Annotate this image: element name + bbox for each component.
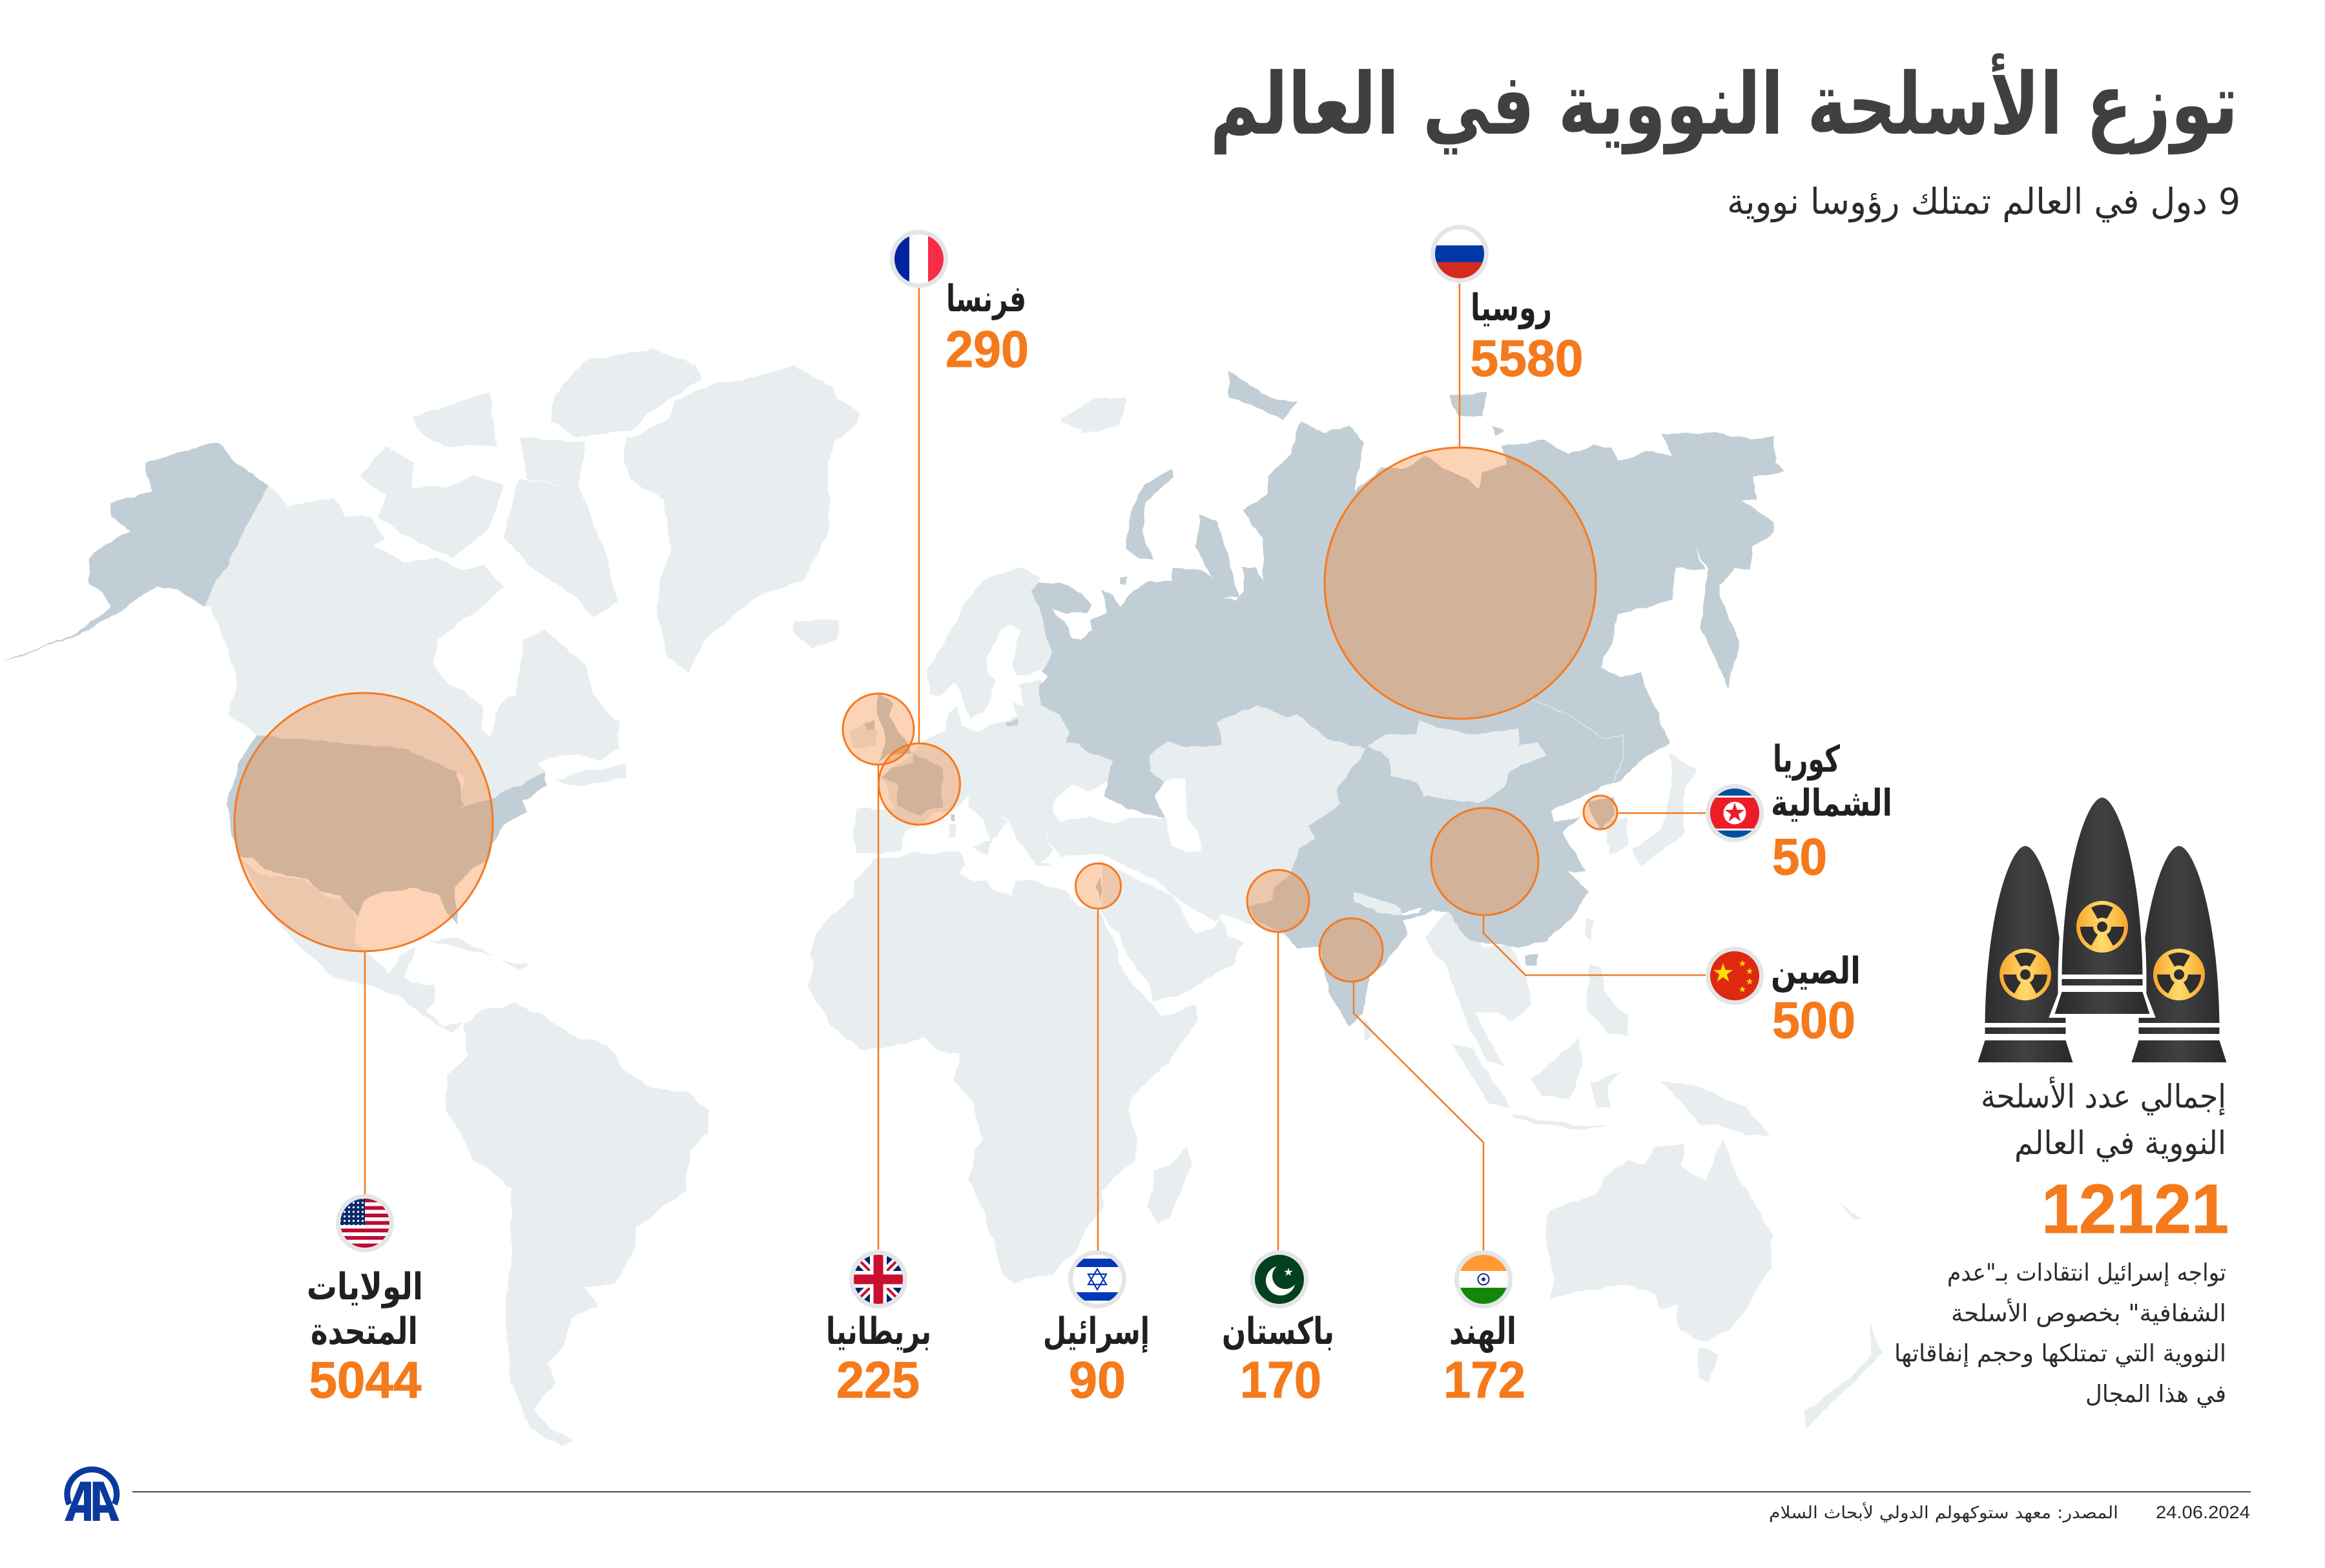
bubble: China 500 bbox=[1431, 808, 1538, 915]
label: Israel bbox=[1043, 1310, 1150, 1408]
icon: three nuclear warheads bbox=[1978, 798, 2227, 1062]
label: China bbox=[1771, 950, 1861, 1049]
flag: Israel bbox=[1068, 1250, 1126, 1308]
label: France bbox=[946, 278, 1029, 378]
bubble: Pakistan 170 bbox=[1247, 870, 1309, 932]
flag: North Korea bbox=[1706, 784, 1764, 842]
icon: radiation centre bbox=[2076, 901, 2128, 953]
flag: China bbox=[1706, 947, 1764, 1005]
label: Israel: إسرائيل bbox=[1043, 1310, 1150, 1354]
map: India and Pakistan (highlighted) bbox=[1248, 840, 1537, 1027]
footer rule bbox=[132, 1491, 2251, 1492]
map: China–Russia border line bbox=[1531, 700, 1623, 780]
label: Russia: روسيا bbox=[1471, 287, 1552, 329]
total heading: النووية في العالم bbox=[2014, 1124, 2226, 1162]
flag: Pakistan bbox=[1250, 1250, 1308, 1308]
icon: radiation left bbox=[2000, 949, 2051, 1000]
map: United States (highlighted) bbox=[4, 442, 547, 924]
label: India: 172 bbox=[1443, 1351, 1525, 1408]
label: France: 290 bbox=[946, 320, 1029, 378]
map: Europe and Middle East bbox=[850, 568, 1367, 940]
label: United Kingdom bbox=[826, 1310, 931, 1408]
note about Israel: النووية التي تمتلكها وحجم إنفاقاتها bbox=[1894, 1339, 2226, 1367]
label: China: الصين bbox=[1771, 950, 1861, 993]
label: France: فرنسا bbox=[946, 278, 1026, 320]
map: Mexico, Caribbean and South America bbox=[239, 856, 708, 1445]
label: India: الهند bbox=[1449, 1310, 1516, 1353]
warhead: centre bbox=[2054, 798, 2150, 1014]
label: North Korea: كوريا bbox=[1773, 738, 1841, 781]
map: North America, Greenland and Arctic islands bbox=[204, 349, 1127, 808]
label: Pakistan: باكستان bbox=[1222, 1310, 1334, 1353]
leader lines bbox=[365, 284, 1706, 1250]
label: Pakistan bbox=[1222, 1310, 1334, 1408]
total heading bbox=[1981, 1077, 2226, 1162]
label: North Korea: الشمالية bbox=[1771, 782, 1892, 825]
note about Israel: في هذا المجال bbox=[2085, 1380, 2226, 1408]
label: Israel: 90 bbox=[1069, 1351, 1126, 1408]
date: 24.06.2024 bbox=[2156, 1502, 2250, 1522]
flag: India bbox=[1454, 1250, 1513, 1308]
bubble: India 172 bbox=[1319, 918, 1383, 982]
map: Russia west and British Isles, France, Israel (highlighted) bbox=[864, 452, 1324, 901]
map: Africa and Arabia bbox=[808, 852, 1243, 1283]
world map bbox=[4, 349, 1883, 1445]
map: South-East Asia and Oceania bbox=[1363, 909, 1883, 1429]
bubble: United States 5044 bbox=[234, 693, 493, 951]
label: Pakistan: 170 bbox=[1240, 1351, 1321, 1408]
flag: United Kingdom bbox=[849, 1250, 907, 1308]
map: Japan, South Korea and Svalbard bbox=[1061, 397, 1699, 867]
total number: 12121 bbox=[2041, 1170, 2229, 1248]
bubble: France 290 bbox=[878, 743, 960, 825]
total heading: إجمالي عدد الأسلحة bbox=[1981, 1077, 2226, 1116]
flag: France bbox=[890, 230, 948, 288]
label: Russia bbox=[1470, 287, 1584, 387]
bubble: United Kingdom 225 bbox=[843, 694, 914, 765]
label: United Kingdom: 225 bbox=[836, 1351, 920, 1408]
map: Nepal bbox=[1352, 891, 1401, 914]
label: United States bbox=[307, 1266, 423, 1408]
label: India bbox=[1443, 1310, 1525, 1408]
warhead: left bbox=[1978, 846, 2073, 1062]
icon: AA logo bbox=[65, 1469, 119, 1521]
map: Russia east and China (highlighted) bbox=[1199, 370, 1784, 947]
source: المصدر: معهد ستوكهولم الدولي لأبحاث السلام bbox=[1769, 1501, 2118, 1523]
bubble: Russia 5580 bbox=[1325, 448, 1596, 719]
note about Israel bbox=[1894, 1259, 2226, 1408]
note about Israel: تواجه إسرائيل انتقادات بـ"عدم bbox=[1947, 1259, 2226, 1286]
label: United States: الولايات bbox=[307, 1266, 423, 1308]
label: United Kingdom: بريطانيا bbox=[826, 1310, 931, 1353]
icon: radiation right bbox=[2153, 949, 2205, 1000]
bubble: North Korea 50 bbox=[1584, 796, 1617, 829]
label: North Korea: 50 bbox=[1772, 828, 1827, 885]
label: North Korea bbox=[1771, 738, 1892, 885]
bubble: Israel 90 bbox=[1076, 863, 1121, 909]
subtitle: 9 دول في العالم تمتلك رؤوسا نووية bbox=[1727, 181, 2240, 223]
label: United States: 5044 bbox=[309, 1351, 422, 1408]
label: Russia: 5580 bbox=[1470, 329, 1584, 387]
map: Mongolia bbox=[1370, 720, 1545, 803]
label: China: 500 bbox=[1772, 991, 1855, 1049]
warhead: right bbox=[2131, 846, 2227, 1062]
note about Israel: الشفافية" بخصوص الأسلحة bbox=[1951, 1298, 2226, 1327]
label: United States: المتحدة bbox=[311, 1310, 418, 1353]
flag: United States bbox=[336, 1194, 394, 1252]
flag: Russia bbox=[1431, 225, 1489, 283]
